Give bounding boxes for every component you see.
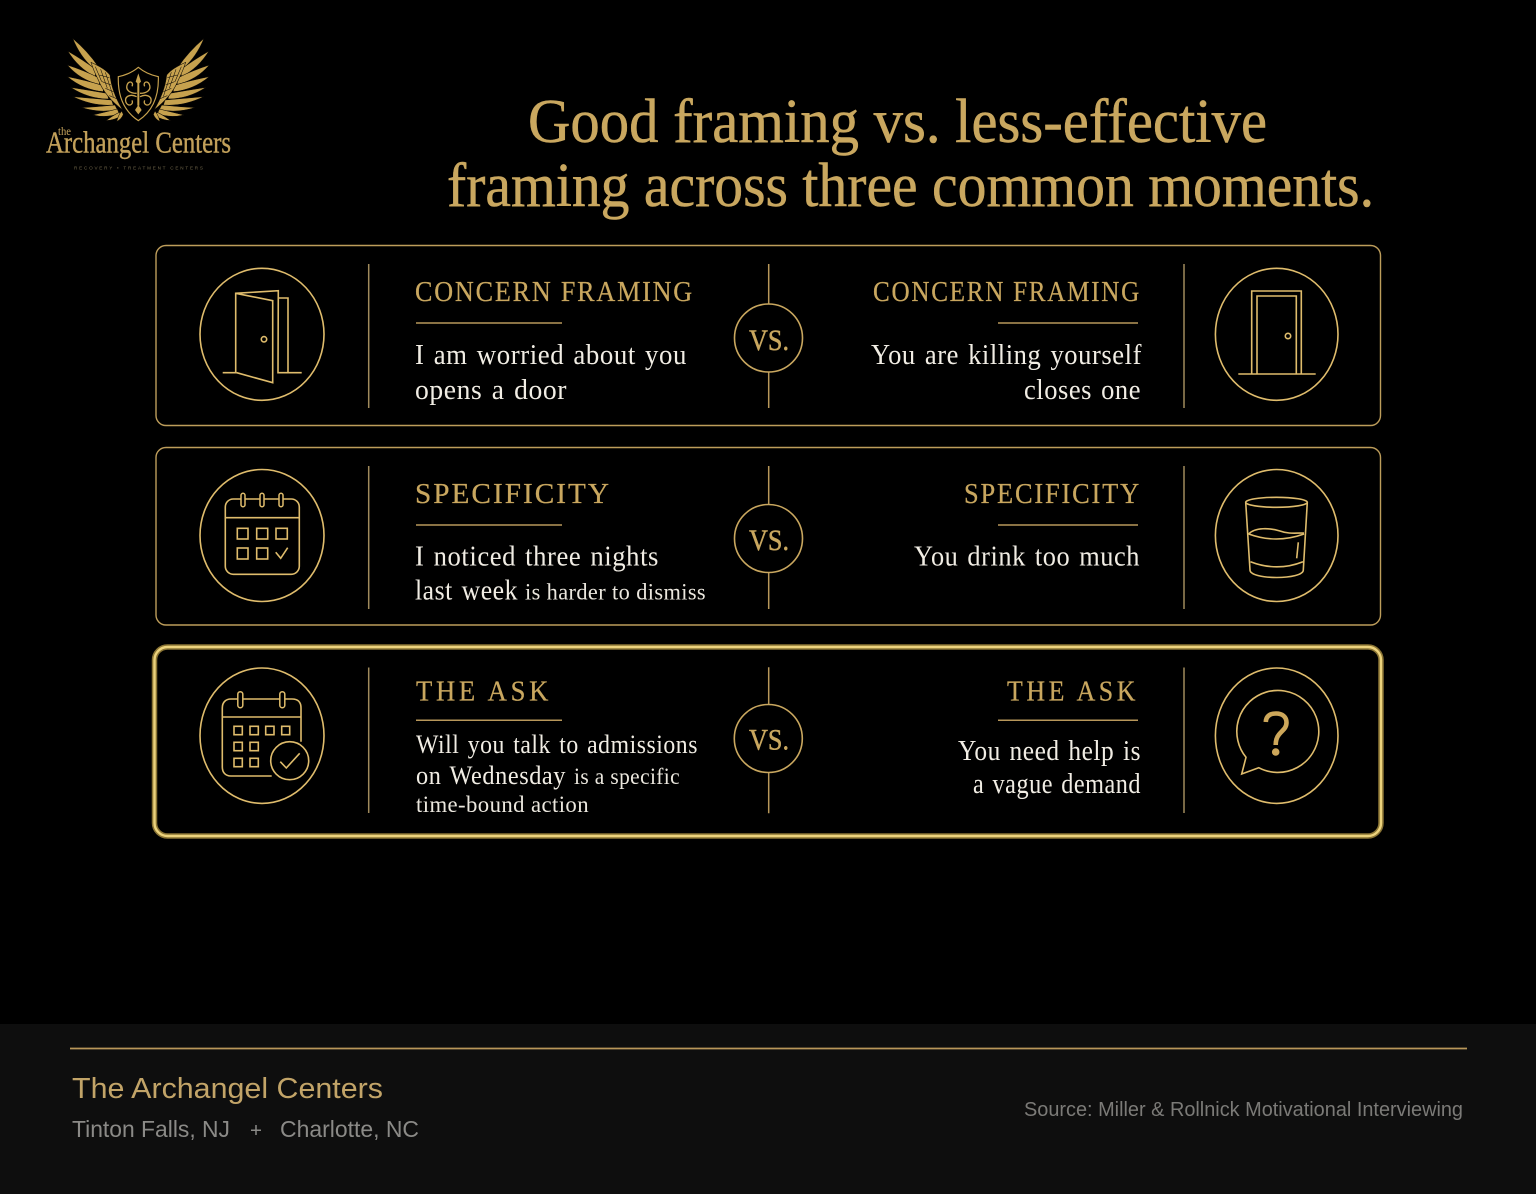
footer organisation name: The Archangel Centers <box>72 1073 383 1105</box>
vs badge: VS. <box>749 324 789 357</box>
logo wordmark: the <box>58 124 71 138</box>
logo wordmark: Archangel Centers <box>46 124 231 160</box>
logo wordmark: RECOVERY • TREATMENT CENTERS <box>74 166 203 170</box>
source note: Source: Miller & Rollnick Motivational Interviewing <box>1024 1099 1463 1121</box>
icon: open door <box>200 268 324 400</box>
icon: glass <box>1215 470 1338 602</box>
panel: specificity <box>156 448 1380 625</box>
less-effective framing text: a vague demand <box>973 769 1141 800</box>
footer locations <box>72 1116 419 1142</box>
icon: closed door <box>1215 268 1338 400</box>
footer locations: + <box>250 1120 262 1142</box>
logo: The Archangel Centers <box>46 38 231 171</box>
title <box>447 88 1374 220</box>
title: Good framing vs. less-effective <box>528 88 1267 156</box>
icon: question speech bubble <box>1215 668 1338 803</box>
less-effective framing text <box>914 478 1141 572</box>
vs badge <box>734 667 802 813</box>
less-effective framing text: SPECIFICITY <box>964 478 1141 510</box>
good framing text <box>416 676 698 817</box>
good framing text: opens a door <box>415 375 567 406</box>
good framing text: SPECIFICITY <box>415 478 611 510</box>
less-effective framing text <box>958 676 1141 800</box>
vs badge: VS. <box>749 724 789 756</box>
good framing text: I noticed three nights <box>415 542 659 572</box>
footer <box>0 1024 1536 1194</box>
logo wordmark <box>46 124 231 170</box>
vs badge <box>734 264 802 408</box>
less-effective framing text: You are killing yourself <box>871 340 1142 371</box>
panel: concern framing <box>156 246 1380 426</box>
less-effective framing text: You need help is <box>958 736 1141 767</box>
panel: the ask (highlighted) <box>154 647 1381 836</box>
good framing text: CONCERN FRAMING <box>415 276 694 308</box>
icon: calendar with check <box>200 470 324 602</box>
good framing text <box>415 276 694 406</box>
less-effective framing text <box>871 276 1142 406</box>
title: framing across three common moments. <box>447 152 1374 220</box>
vs badge <box>734 466 802 609</box>
good framing text: on Wednesday <box>416 761 566 790</box>
vs badge: VS. <box>749 524 789 557</box>
footer locations: Tinton Falls, NJ <box>72 1116 230 1142</box>
good framing text <box>415 478 706 606</box>
good framing text: Will you talk to admissions <box>416 730 698 759</box>
good framing text: I am worried about you <box>415 340 687 371</box>
good framing text: time-bound action <box>416 792 589 817</box>
footer locations: Charlotte, NC <box>280 1116 419 1142</box>
good framing text: THE ASK <box>416 676 552 708</box>
icon: winged shield <box>67 38 209 122</box>
less-effective framing text: closes one <box>1024 375 1141 406</box>
icon: calendar with check badge <box>200 668 324 803</box>
good framing text: last week <box>415 576 518 606</box>
less-effective framing text: You drink too much <box>914 542 1140 572</box>
less-effective framing text: CONCERN FRAMING <box>873 276 1141 308</box>
good framing text: is harder to dismiss <box>525 580 706 604</box>
less-effective framing text: THE ASK <box>1007 676 1139 708</box>
good framing text: is a specific <box>574 764 680 789</box>
